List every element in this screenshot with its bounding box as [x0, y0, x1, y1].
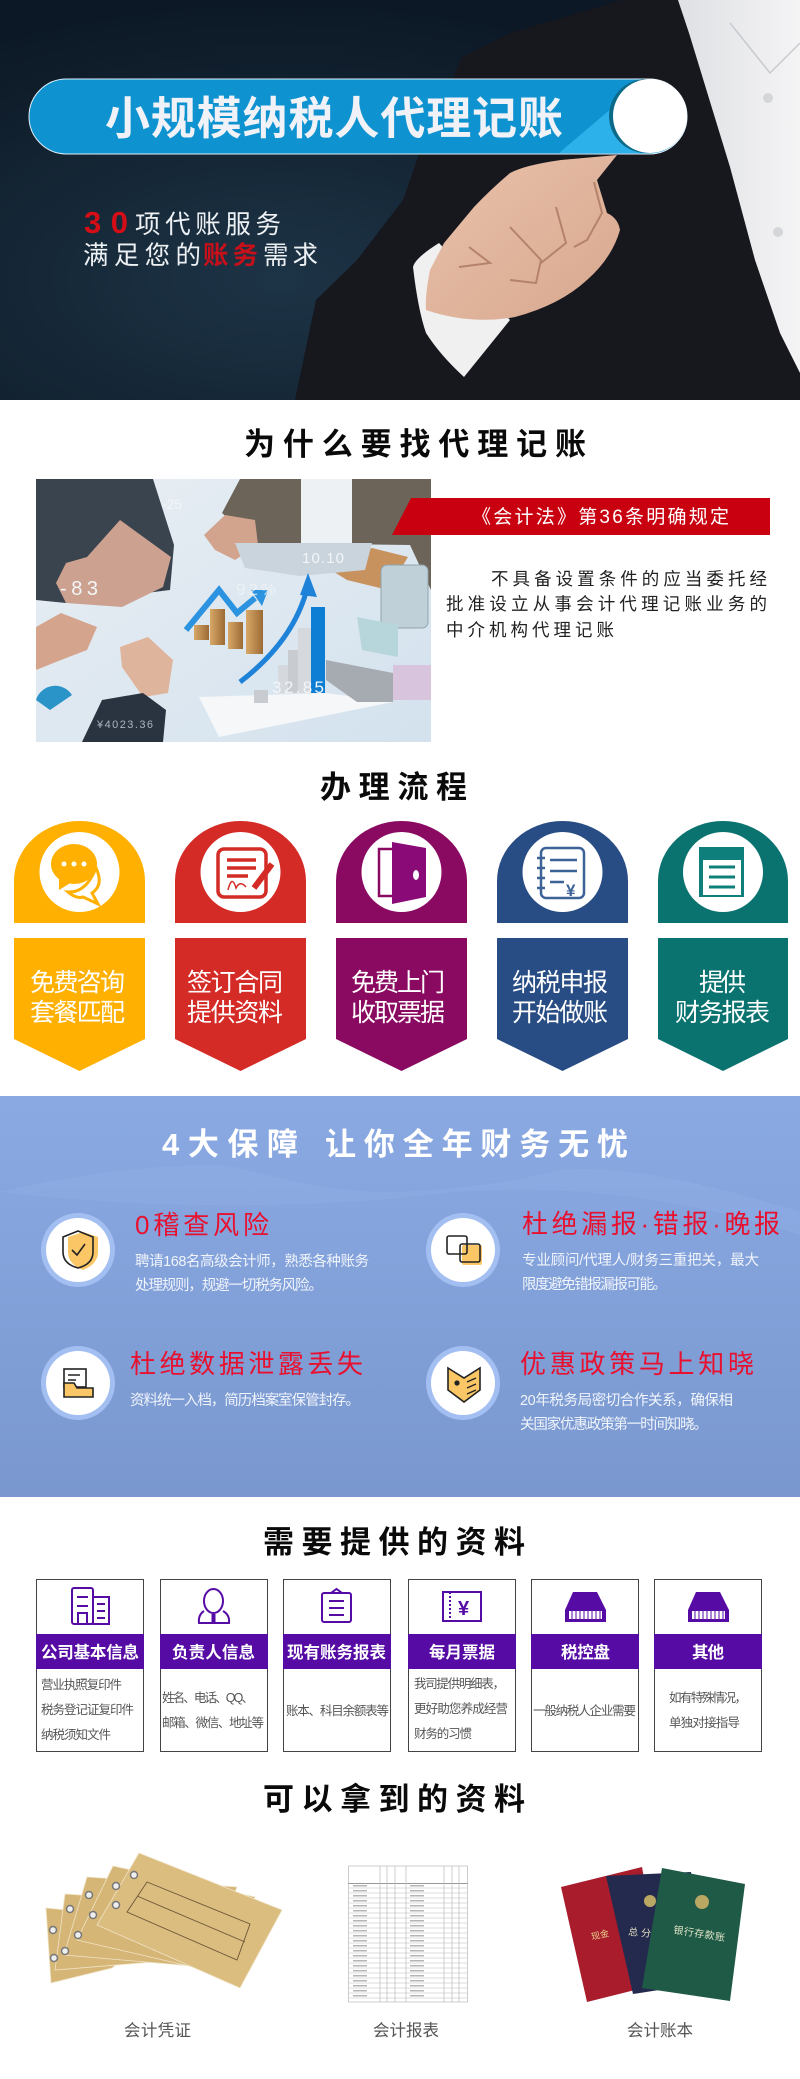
chart paper: [199, 693, 393, 737]
icon: tax notebook: ¥: [566, 881, 576, 900]
icon: door: [379, 842, 426, 904]
red banner: accounting law: 《会计法》第36条明确规定: [472, 506, 729, 528]
captions: [124, 2021, 693, 2040]
icon: tax notebook: [537, 848, 584, 900]
paper roll: [326, 660, 393, 702]
card: responsible person: 负责人信息: [172, 1642, 255, 1662]
icon: yen receipt: [443, 1592, 481, 1621]
shirt cuff: [413, 243, 510, 377]
card: tax disk: 一般纳税人企业需要: [533, 1703, 636, 1718]
heading: required materials: 需要提供的资料: [263, 1525, 525, 1560]
process step 5: [658, 821, 788, 1071]
photo figures: 10.10: [302, 550, 344, 567]
process step 3: 免费上门: [351, 969, 445, 997]
hero subtitle: 30: [84, 205, 128, 240]
hero subtitle: 满足您的: [83, 242, 201, 270]
photo figures: 92%: [236, 580, 276, 599]
heading: deliverables: 可以拿到的资料: [263, 1782, 525, 1817]
guarantee: policy updates: 20年税务局密切合作关系，确保相: [520, 1392, 733, 1409]
image: accounting vouchers: [46, 1853, 282, 1988]
card: company information: 公司基本信息: [41, 1642, 139, 1662]
text block: law explanation: 不具备设置条件的应当委托经: [491, 569, 767, 589]
card: company information: 营业执照复印件: [41, 1678, 122, 1692]
heading: why: 为什么要找代理记账: [244, 427, 586, 462]
photo figures: -83: [60, 578, 98, 600]
process step 4: 纳税申报: [512, 969, 608, 997]
card: others: 如有特殊情况，: [669, 1690, 747, 1705]
guarantee: no data leaks: 杜绝数据泄露丢失: [130, 1349, 363, 1379]
card: responsible person: [160, 1580, 268, 1752]
icon: tax control disk: [565, 1592, 606, 1622]
guarantee: no data leaks: [41, 1346, 363, 1420]
title: 小规模纳税人代理记账: [105, 93, 563, 144]
icon: shield: [63, 1231, 98, 1270]
red banner: accounting law: [392, 498, 770, 535]
search pill: [29, 79, 687, 154]
pointing hand: [426, 155, 620, 320]
process step 2: [175, 821, 306, 1071]
image: account books: 总 分: [628, 1925, 652, 1940]
bars: [311, 607, 325, 693]
captions: 会计账本: [627, 2021, 693, 2040]
card: monthly receipts: 每月票据: [429, 1643, 495, 1662]
hero subtitle: 项代账服务: [135, 211, 281, 239]
card: monthly receipts: 我司提供明细表，: [414, 1676, 505, 1691]
text block: law explanation: 批准设立从事会计代理记账业务的: [446, 594, 767, 614]
process step 2: 签订合同: [187, 969, 283, 997]
process step 3: 收取票据: [351, 999, 445, 1027]
icon: chat bubbles: [51, 844, 99, 904]
card: company information: 税务登记证复印件: [41, 1702, 134, 1717]
icon: overlapping pages: [447, 1236, 482, 1265]
hero subtitle: [83, 205, 318, 270]
photo figures: -25: [162, 496, 182, 512]
glass: [381, 565, 428, 628]
card: others: 其他: [692, 1643, 724, 1662]
image: account books: 现金: [590, 1927, 610, 1942]
card: responsible person: 姓名、电话、QQ、: [162, 1690, 254, 1705]
guarantee: zero audit risk: 处理规则，规避一切税务风险。: [135, 1277, 323, 1294]
icon: buildings: [72, 1588, 109, 1624]
process step 1: 套餐匹配: [30, 999, 125, 1027]
heading: [162, 1127, 628, 1162]
card: monthly receipts: [408, 1580, 516, 1752]
guarantee: no data leaks: 资料统一入档，简历档案室保管封存。: [130, 1391, 360, 1409]
heading: 让你全年财务无忧: [325, 1127, 628, 1162]
hero subtitle: 账务: [203, 242, 258, 270]
coin stacks: [194, 609, 263, 654]
process step 1: 免费咨询: [30, 969, 125, 997]
card: existing reports: 现有账务报表: [287, 1643, 386, 1662]
icon: person: [199, 1589, 229, 1623]
process step 4: [497, 821, 628, 1071]
card: responsible person: 邮箱、微信、地址等: [162, 1715, 264, 1730]
card: existing reports: [283, 1580, 391, 1752]
text block: law explanation: 中介机构代理记账: [446, 620, 614, 640]
guarantee: zero audit risk: 0稽查风险: [135, 1210, 269, 1240]
text block: law explanation: [446, 569, 767, 640]
process step 4: 开始做账: [512, 999, 608, 1027]
tablet: [235, 543, 372, 576]
icon: tax control disk: [688, 1592, 729, 1622]
card: monthly receipts: 更好助您养成经营: [414, 1701, 508, 1716]
icon: clipboard: [322, 1589, 351, 1622]
process step 3: [336, 821, 467, 1071]
blue arrows: [186, 590, 255, 630]
card: others: 单独对接指导: [669, 1715, 740, 1730]
process step 1: [14, 821, 145, 1071]
icon: financial report: [699, 847, 744, 897]
guarantee: no missed filings: 专业顾问/代理人/财务三重把关，最大: [522, 1252, 759, 1269]
guarantee: no missed filings: [426, 1209, 780, 1293]
card: others: [654, 1580, 762, 1752]
icon: signed contract: [218, 849, 272, 897]
process step 5: 提供: [699, 969, 746, 997]
panel: hero banner: [0, 0, 800, 400]
captions: 会计报表: [373, 2021, 439, 2040]
guarantee: policy updates: 优惠政策马上知晓: [520, 1349, 754, 1379]
heading: process: 办理流程: [320, 770, 467, 805]
icon: open book: [448, 1368, 480, 1402]
hero subtitle: 需求: [263, 242, 318, 270]
image: account books: 银行存款账: [673, 1923, 726, 1944]
photo figures: 32.85: [272, 678, 324, 697]
card: company information: [36, 1580, 144, 1752]
card: existing reports: 账本、科目余额表等: [286, 1703, 389, 1718]
card: company information: 纳税须知文件: [41, 1727, 111, 1742]
image: accounting report table: [348, 1866, 468, 2002]
photo: business meeting chart: [36, 479, 431, 742]
card: tax disk: 税控盘: [561, 1642, 610, 1662]
guarantee: zero audit risk: 聘请168名高级会计师，熟悉各种账务: [135, 1253, 369, 1270]
guarantee: policy updates: 关国家优惠政策第一时间知晓。: [520, 1415, 708, 1433]
process step 5: 财务报表: [675, 999, 770, 1027]
process step 2: 提供资料: [187, 999, 283, 1027]
guarantee: zero audit risk: [41, 1210, 369, 1294]
photo figures: [60, 496, 344, 731]
icon: yen receipt: ¥: [458, 1598, 470, 1620]
card: monthly receipts: 财务的习惯: [414, 1726, 472, 1741]
guarantee: no missed filings: 限度避免错报漏报可能。: [522, 1276, 667, 1293]
captions: 会计凭证: [124, 2021, 191, 2040]
icon: folder: [64, 1369, 93, 1397]
photo figures: ¥4023.36: [96, 719, 153, 731]
heading: 4大保障: [162, 1127, 298, 1162]
white shirt: [678, 0, 800, 373]
image: account books: [561, 1867, 745, 2002]
card: tax disk: [531, 1580, 639, 1752]
guarantee: no missed filings: 杜绝漏报·错报·晚报: [522, 1209, 780, 1239]
guarantee: policy updates: [426, 1346, 754, 1433]
suit jacket: [295, 0, 800, 400]
panel: four guarantees: [0, 1096, 800, 1497]
